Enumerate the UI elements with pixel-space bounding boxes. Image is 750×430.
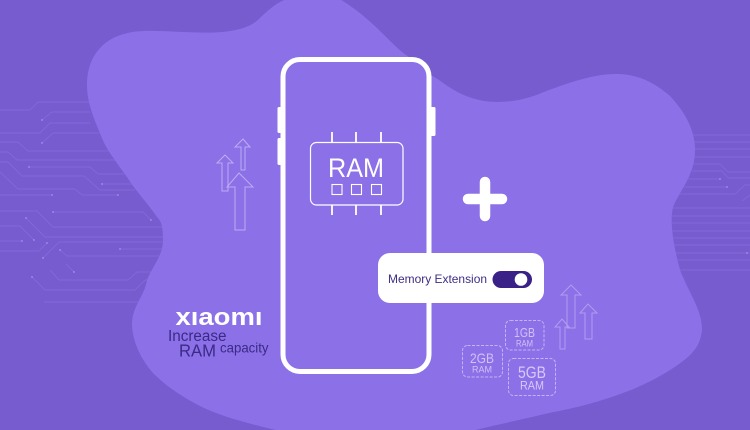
RAM size badge: 2GB: RAM — [472, 364, 492, 374]
RAM size badge: 5GB: 5GB — [518, 363, 546, 382]
RAM size badge: 5GB — [508, 358, 556, 396]
RAM size badge: 1GB — [506, 320, 544, 350]
caption: increase RAM capacity — [168, 328, 268, 360]
arrows: right group — [555, 285, 597, 349]
RAM size badge: 2GB: 2GB — [470, 350, 494, 366]
phone — [278, 60, 436, 372]
phone body outline — [283, 60, 429, 372]
RAM size badge: 5GB: RAM — [520, 380, 544, 392]
plus icon — [468, 182, 502, 216]
caption: increase RAM capacity: RAM — [179, 340, 216, 360]
arrows: left group — [217, 139, 253, 230]
chip pins — [332, 132, 381, 215]
caption: increase RAM capacity: capacity — [220, 340, 268, 356]
chip squares — [332, 184, 382, 194]
phone side buttons — [278, 107, 436, 165]
chip label: RAM — [328, 153, 384, 183]
circuit pattern: left — [0, 102, 165, 302]
caption: increase RAM capacity: Increase — [168, 328, 226, 345]
chip body — [310, 142, 403, 205]
RAM size badge: 2GB — [462, 346, 502, 377]
RAM size badge: 1GB: 1GB — [514, 325, 535, 340]
RAM size badge: 1GB: RAM — [516, 338, 533, 348]
card background — [378, 253, 544, 303]
RAM chip icon — [310, 132, 403, 215]
xiaomi logo: xiaomi — [176, 304, 262, 331]
card label: Memory Extension — [388, 272, 487, 286]
memory extension card — [378, 253, 544, 303]
circuit pattern: right — [670, 135, 750, 270]
toggle switch — [492, 271, 532, 288]
